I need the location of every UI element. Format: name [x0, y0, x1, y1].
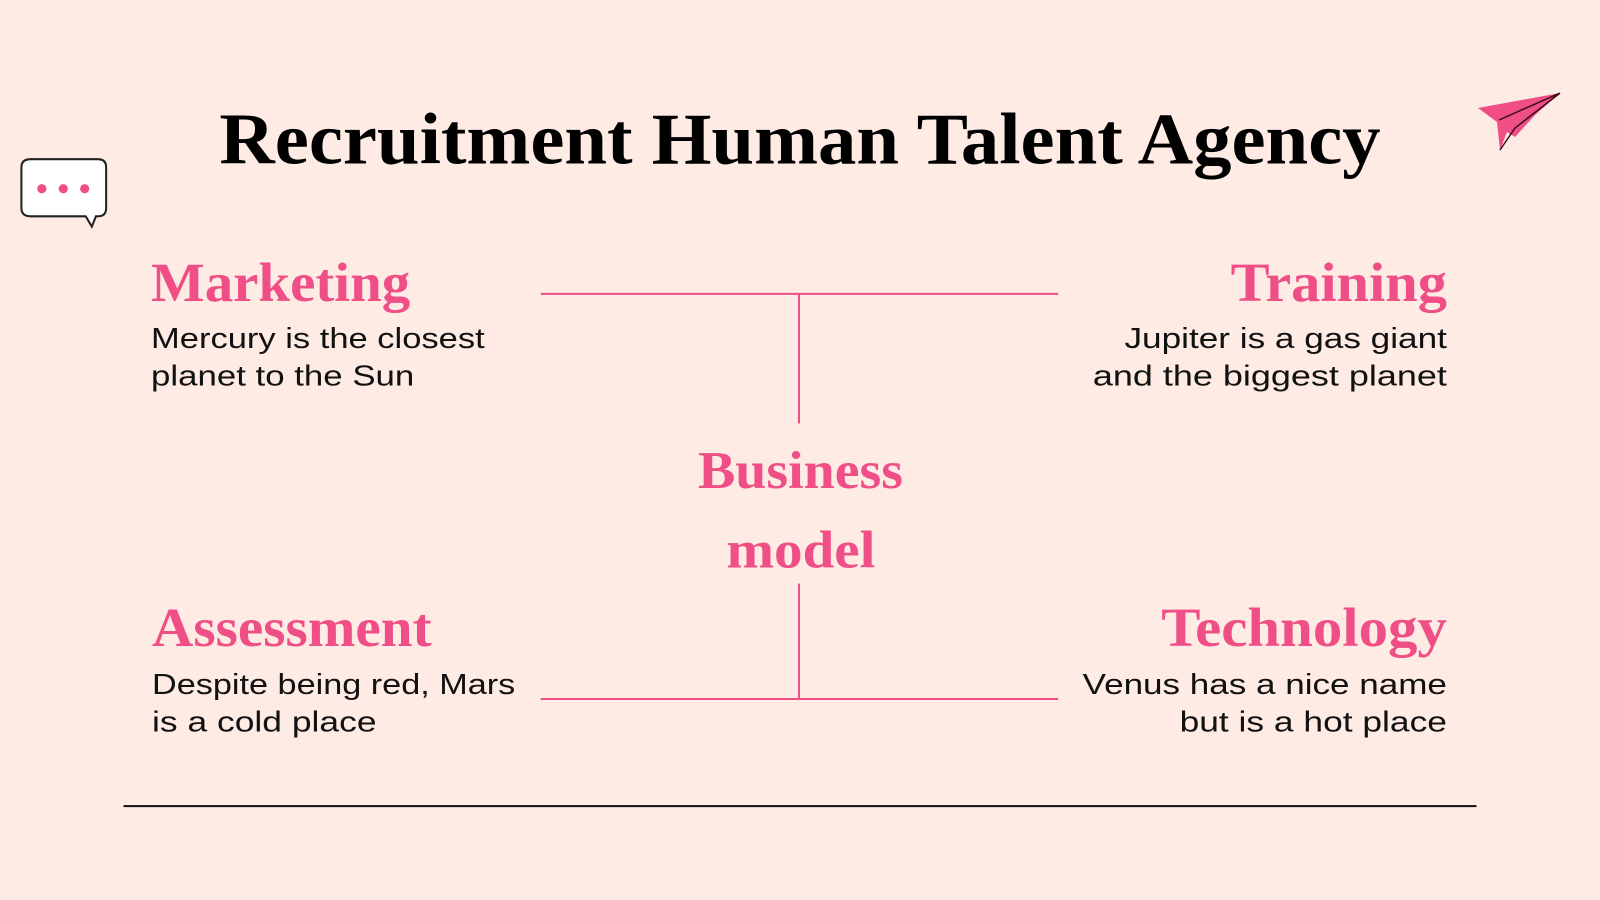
panel: assessment: is a cold place [152, 707, 377, 739]
center: business model: model [727, 521, 876, 579]
panel: assessment: Despite being red, Mars [152, 669, 515, 701]
icon: chat bubble [21, 159, 106, 227]
panel: marketing: Mercury is the closest [151, 323, 485, 355]
panel: technology: Technology [1161, 597, 1447, 658]
panel: assessment [152, 597, 515, 739]
panel: training [1093, 252, 1447, 393]
panel: training: and the biggest planet [1093, 361, 1447, 393]
panel: technology [1083, 597, 1447, 739]
panel: assessment: Assessment [152, 597, 432, 658]
panel: technology: but is a hot place [1180, 707, 1447, 739]
center: business model [698, 442, 903, 579]
panel: technology: Venus has a nice name [1083, 669, 1447, 701]
panel: training: Jupiter is a gas giant [1124, 323, 1447, 355]
panel: marketing: Marketing [151, 252, 411, 313]
panel: training: Training [1231, 252, 1447, 313]
panel: marketing [151, 252, 485, 393]
connector lines [541, 294, 1058, 699]
center: business model: Business [698, 442, 903, 500]
title: Recruitment Human Talent Agency [219, 98, 1381, 179]
panel: marketing: planet to the Sun [151, 361, 414, 393]
icon: paper plane [1478, 93, 1560, 150]
